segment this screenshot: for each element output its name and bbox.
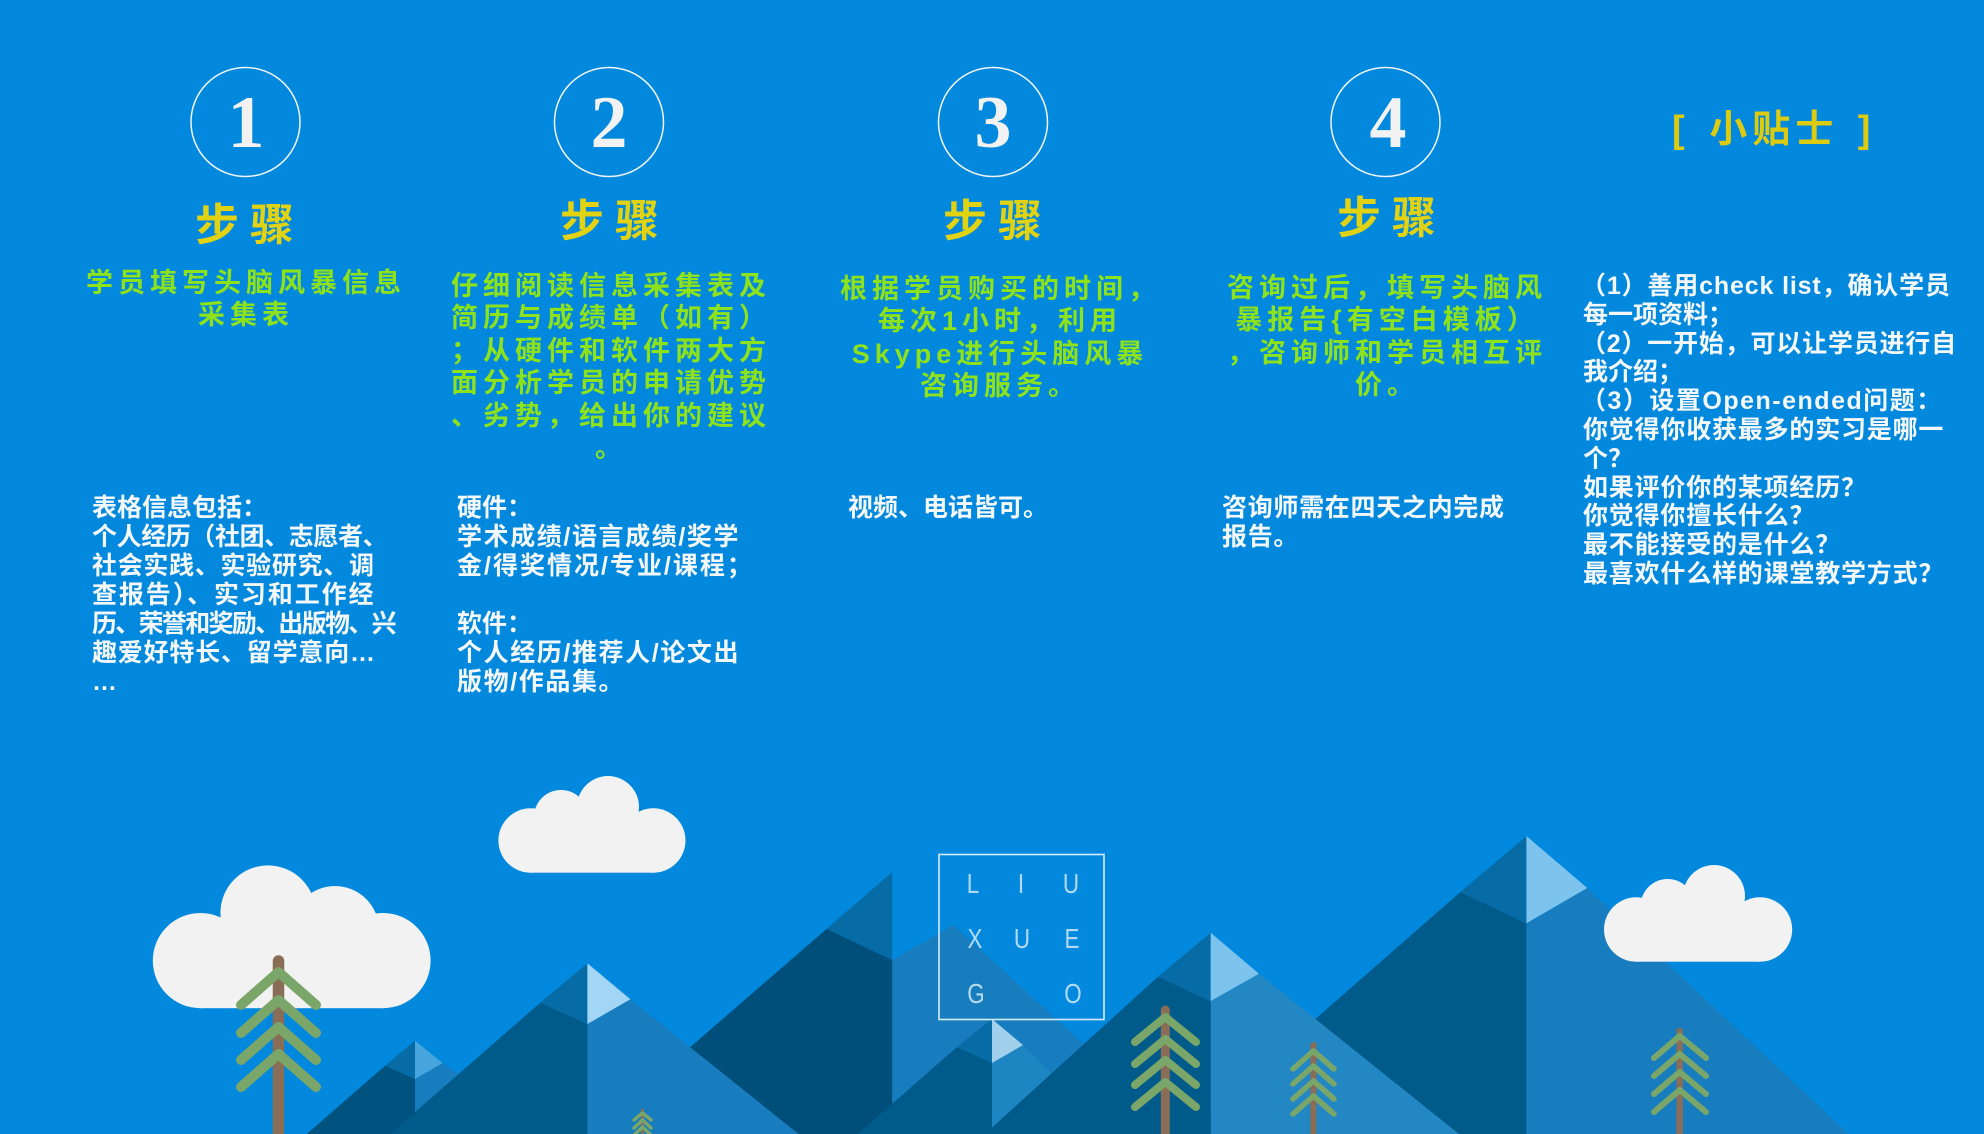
green text: step 2: 仔细阅读信息采集表及 bbox=[451, 271, 771, 301]
white text: step 2 details bbox=[457, 494, 754, 696]
tree: centre small bbox=[1293, 1045, 1334, 1134]
heading: step 3: 步骤 bbox=[943, 197, 1053, 246]
number circle 2 bbox=[554, 68, 664, 176]
mountain: centre right bbox=[985, 933, 1459, 1134]
cloud: left large bbox=[153, 865, 431, 1008]
heading: step 4: 步骤 bbox=[1337, 194, 1447, 243]
green text: step 3: Skype进行头脑风暴 bbox=[852, 339, 1148, 369]
white text: step 1 details: 查报告）、实习和工作经 bbox=[92, 581, 375, 609]
white text: step 1 details: 历、荣誉和奖励、出版物、兴 bbox=[92, 610, 395, 638]
number circle 1: 1 bbox=[228, 82, 264, 164]
mountain: far left small bbox=[307, 1041, 540, 1134]
white text: step 2 details: 硬件： bbox=[457, 494, 532, 522]
logo box bbox=[939, 854, 1104, 1020]
tree: tiny bottom bbox=[634, 1109, 651, 1134]
heading: step 1: 步骤 bbox=[195, 201, 305, 250]
tree: right bbox=[1654, 1031, 1706, 1134]
white text: step 3 details: 视频、电话皆可。 bbox=[848, 494, 1048, 522]
number circle 2: 2 bbox=[590, 82, 628, 164]
white text: step 1 details: 个人经历（社团、志愿者、 bbox=[92, 523, 387, 551]
logo box: O bbox=[1064, 979, 1082, 1010]
white text: step 1 details: … bbox=[92, 668, 117, 696]
white text: tips list: 如果评价你的某项经历？ bbox=[1583, 474, 1867, 502]
green text: step 3: 每次1小时，利用 bbox=[878, 306, 1122, 336]
white text: tips list: 你觉得你擅长什么？ bbox=[1583, 502, 1815, 530]
white text: step 1 details: 社会实践、实验研究、调 bbox=[92, 552, 375, 580]
green text: step 4: 暴报告{有空白模板） bbox=[1235, 305, 1539, 335]
green text: step 4: 咨询过后，填写头脑风 bbox=[1227, 273, 1547, 303]
mountain: centre small bbox=[858, 1019, 1110, 1134]
white text: tips list: 最不能接受的是什么？ bbox=[1583, 531, 1841, 559]
white text: tips list: 每一项资料； bbox=[1583, 301, 1733, 329]
number circle 3: 3 bbox=[974, 82, 1012, 164]
green text: step 2 bbox=[451, 271, 771, 463]
green text: step 2: 、劣势，给出你的建议 bbox=[451, 401, 771, 431]
green text: step 1 bbox=[86, 268, 406, 330]
number circle 1 bbox=[191, 68, 300, 176]
white text: step 2 details: 版物/作品集。 bbox=[457, 668, 625, 696]
logo box: L bbox=[967, 869, 979, 900]
logo box: E bbox=[1065, 924, 1079, 955]
green text: step 4: 价。 bbox=[1355, 370, 1419, 400]
heading: step 2: 步骤 bbox=[560, 197, 670, 246]
green text: step 2: 。 bbox=[595, 433, 627, 463]
white text: step 2 details: 金/得奖情况/专业/课程； bbox=[457, 552, 754, 580]
mountain: far right big bbox=[1184, 836, 1848, 1134]
logo box: I bbox=[1018, 869, 1024, 900]
white text: step 1 details bbox=[92, 494, 396, 696]
white text: tips list: （3）设置Open-ended问题： bbox=[1581, 387, 1943, 415]
white text: step 4 details: 咨询师需在四天之内完成 bbox=[1222, 494, 1505, 522]
tree: centre bbox=[1135, 1010, 1196, 1134]
cloud: top centre bbox=[498, 776, 686, 873]
green text: step 4: ，咨询师和学员相互评 bbox=[1227, 338, 1547, 368]
white text: step 2 details: 软件： bbox=[457, 610, 532, 638]
cloud: right bbox=[1604, 865, 1792, 962]
white text: step 2 details: 学术成绩/语言成绩/奖学 bbox=[457, 523, 740, 551]
number circle 4 bbox=[1331, 68, 1440, 176]
white text: step 4 details: 报告。 bbox=[1222, 523, 1299, 551]
white text: step 1 details: 趣爱好特长、留学意向… bbox=[92, 639, 376, 667]
white text: tips list: 我介绍； bbox=[1583, 358, 1683, 386]
white text: tips list: 个？ bbox=[1583, 445, 1633, 473]
green text: step 1: 采集表 bbox=[198, 300, 294, 330]
green text: step 2: ；从硬件和软件两大方 bbox=[451, 336, 771, 366]
white text: tips list: （1）善用check list，确认学员 bbox=[1581, 272, 1951, 300]
tree: left large bbox=[241, 961, 316, 1134]
green text: step 4 bbox=[1227, 273, 1547, 400]
white text: step 2 details: 个人经历/推荐人/论文出 bbox=[457, 639, 740, 667]
green text: step 3: 根据学员购买的时间， bbox=[840, 274, 1160, 304]
logo box: G bbox=[967, 979, 985, 1010]
logo box: X bbox=[968, 924, 983, 955]
white text: tips list bbox=[1581, 272, 1957, 588]
green text: step 2: 面分析学员的申请优势 bbox=[451, 368, 771, 398]
mountain: big back bbox=[590, 872, 1182, 1134]
green text: step 3 bbox=[840, 274, 1160, 401]
mountain: left main bbox=[390, 963, 799, 1134]
white text: tips list: （2）一开始，可以让学员进行自 bbox=[1581, 330, 1957, 358]
white text: tips list: 最喜欢什么样的课堂教学方式？ bbox=[1583, 560, 1944, 588]
number circle 3 bbox=[938, 68, 1048, 176]
white text: step 1 details: 表格信息包括： bbox=[92, 494, 267, 522]
white text: step 4 details bbox=[1222, 494, 1505, 551]
green text: step 3: 咨询服务。 bbox=[920, 371, 1080, 401]
green text: step 2: 简历与成绩单（如有） bbox=[451, 303, 771, 333]
logo box: U bbox=[1014, 924, 1030, 955]
number circle 4: 4 bbox=[1370, 82, 1406, 164]
logo box: U bbox=[1063, 869, 1079, 900]
heading: tips: [ 小贴士 ] bbox=[1672, 109, 1875, 151]
green text: step 1: 学员填写头脑风暴信息 bbox=[86, 268, 406, 298]
white text: tips list: 你觉得你收获最多的实习是哪一 bbox=[1583, 416, 1944, 444]
